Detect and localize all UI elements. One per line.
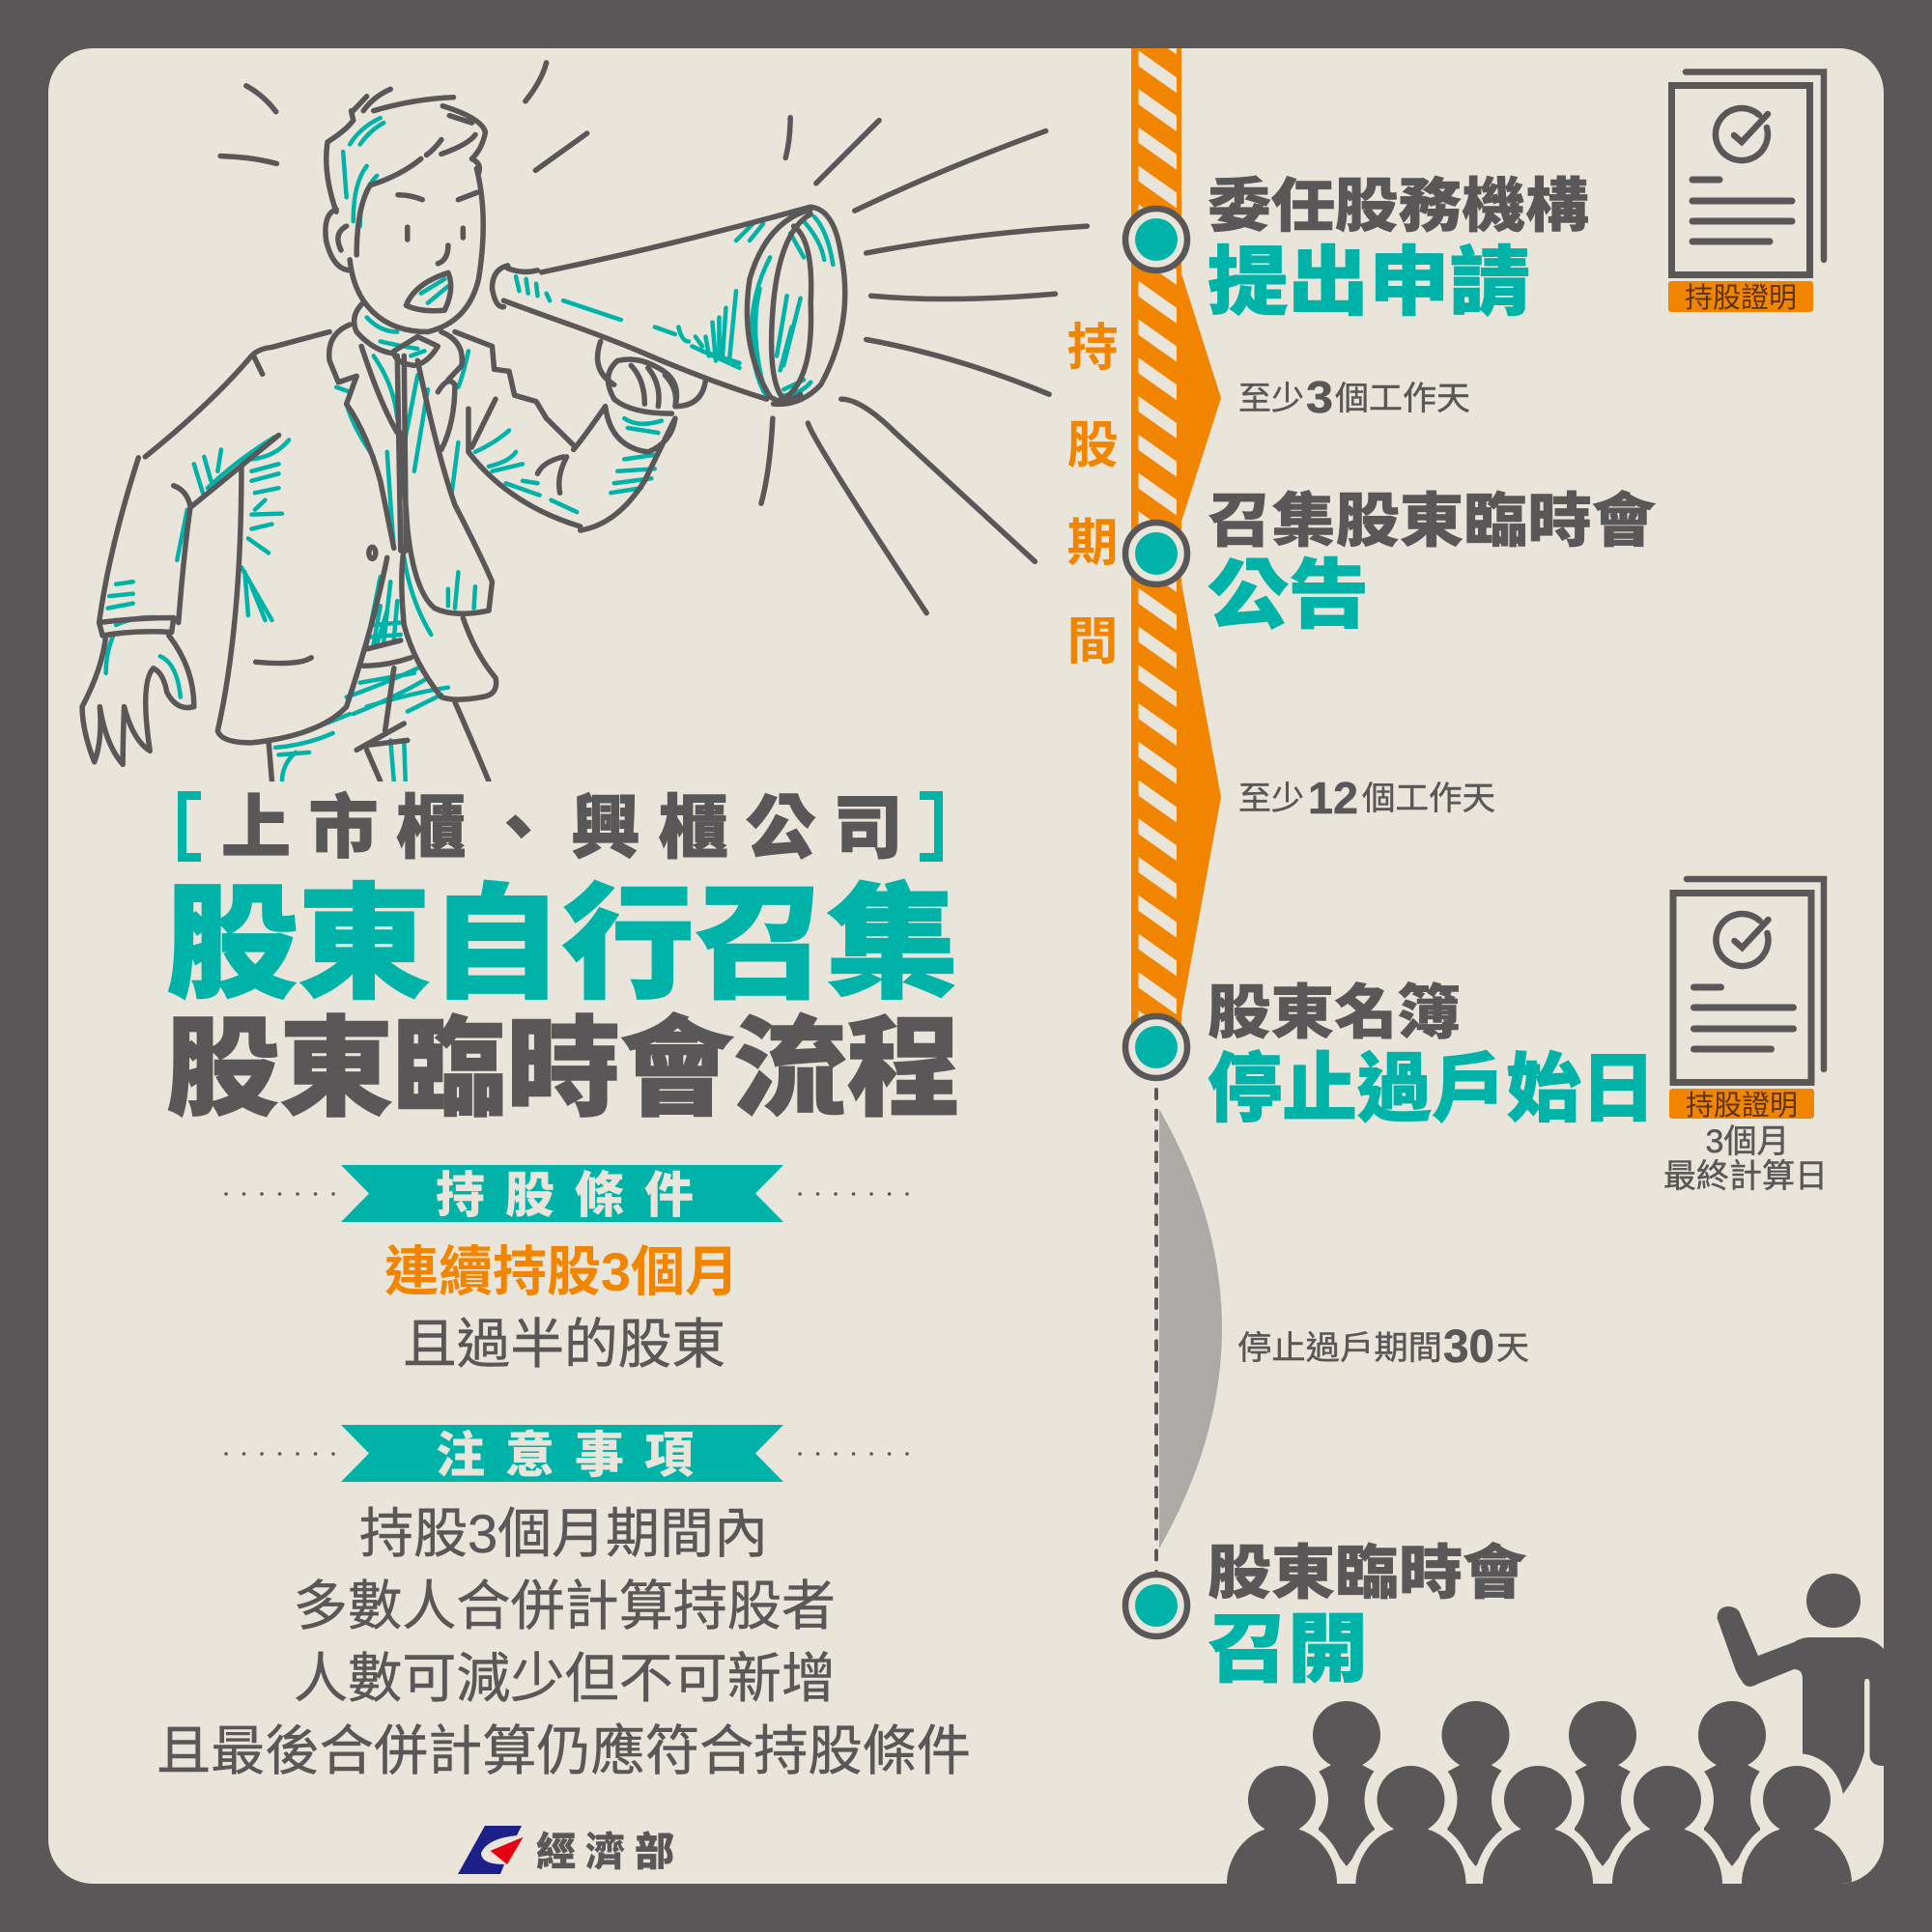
ribbon: notes — [226, 1415, 907, 1487]
ribbon: notes: 注意事項 — [436, 1415, 714, 1487]
step 3 duration label: 天 — [1496, 1330, 1529, 1367]
orange duration wedge 2 — [1181, 582, 1221, 1014]
step 1 duration label: 3 — [1306, 372, 1333, 422]
note: final calculation date: 3個月 — [1706, 1123, 1789, 1160]
condition highlight text: 連續持股3個月 — [384, 1241, 739, 1302]
main title second line: 股東臨時會流程 — [166, 981, 960, 1138]
timeline node 3 — [1125, 1016, 1187, 1078]
ribbon: shareholding condition — [226, 1155, 907, 1227]
note: final calculation date: 最終計算日 — [1663, 1158, 1828, 1195]
subtitle: 上市櫃、興櫃公司: 上市櫃、興櫃公司 — [221, 771, 921, 872]
timeline node 2 — [1125, 523, 1187, 584]
step 2 heading: 公告 — [1208, 535, 1369, 643]
step 2 duration label: 個工作天 — [1362, 781, 1495, 817]
step 3 duration label — [1237, 1321, 1529, 1373]
audience and speaker icon — [1227, 1574, 1884, 1903]
step 2 heading — [1208, 472, 1656, 643]
vertical label: holding period: 間 — [1066, 613, 1119, 670]
step 3 duration label: 30 — [1443, 1321, 1494, 1373]
timeline node 1 — [1125, 209, 1187, 270]
step 1 heading: 委任股務機構 — [1208, 157, 1589, 243]
step 2 duration label: 12 — [1308, 773, 1358, 823]
note: final calculation date — [1663, 1123, 1828, 1195]
timeline bar — [1131, 48, 1222, 1586]
step 1 duration label: 至少 — [1238, 381, 1304, 417]
vertical label: holding period: 股 — [1066, 417, 1119, 474]
audience front row — [1227, 1766, 1852, 1903]
logo: Ministry of Economic Affairs: 經濟部 — [536, 1819, 684, 1877]
ribbon: shareholding condition: 持股條件 — [436, 1155, 714, 1227]
step 2 duration label — [1238, 773, 1495, 823]
striped bar — [1131, 48, 1181, 1024]
icon: shareholding certificate 2 — [1673, 879, 1824, 1082]
grey lens: transfer closure period — [1159, 1109, 1222, 1548]
timeline node 4 — [1125, 1575, 1187, 1636]
illustration: man shouting into megaphone — [82, 63, 1087, 781]
notes text: 且最後合併計算仍應符合持股條件 — [156, 1720, 971, 1781]
step 1 duration label — [1238, 372, 1470, 422]
step 3 heading — [1208, 964, 1656, 1137]
logo: Ministry of Economic Affairs — [458, 1819, 684, 1877]
badge: shareholding certificate 1: 持股證明 — [1685, 282, 1797, 314]
audience back row — [1313, 1701, 1766, 1866]
vertical label: holding period: 期 — [1066, 515, 1119, 572]
step 2 heading: 召集股東臨時會 — [1208, 472, 1656, 558]
condition text: 且過半的股東 — [403, 1314, 725, 1375]
icon: shareholding certificate 1 — [1671, 71, 1824, 274]
step 3 heading: 股東名簿 — [1208, 964, 1461, 1050]
step 1 heading: 提出申請 — [1208, 222, 1530, 330]
notes text: 持股3個月期間內 — [359, 1503, 768, 1564]
dashed line — [1154, 1090, 1158, 1586]
step 3 heading: 停止過戶始日 — [1208, 1029, 1656, 1137]
step 3 duration label: 停止過戶期間 — [1237, 1330, 1442, 1367]
vertical label: holding period — [1066, 320, 1119, 670]
step 2 duration label: 至少 — [1238, 781, 1304, 817]
notes text — [156, 1503, 971, 1781]
vertical label: holding period: 持 — [1066, 320, 1119, 377]
step 4 heading: 股東臨時會 — [1208, 1524, 1526, 1610]
main title: 股東自行召集 — [166, 843, 958, 1024]
step 4 heading — [1208, 1524, 1526, 1697]
notes text: 多數人合併計算持股者 — [294, 1576, 836, 1636]
step 1 duration label: 個工作天 — [1335, 381, 1470, 417]
orange duration wedge 1 — [1181, 273, 1221, 522]
bottom frame strip — [0, 1884, 1932, 1932]
speaker — [1718, 1574, 1884, 1794]
step 4 heading: 召開 — [1208, 1589, 1368, 1697]
badge: shareholding certificate 2: 持股證明 — [1686, 1090, 1798, 1122]
step 1 heading — [1208, 157, 1589, 330]
notes text: 人數可減少但不可新增 — [294, 1648, 836, 1709]
